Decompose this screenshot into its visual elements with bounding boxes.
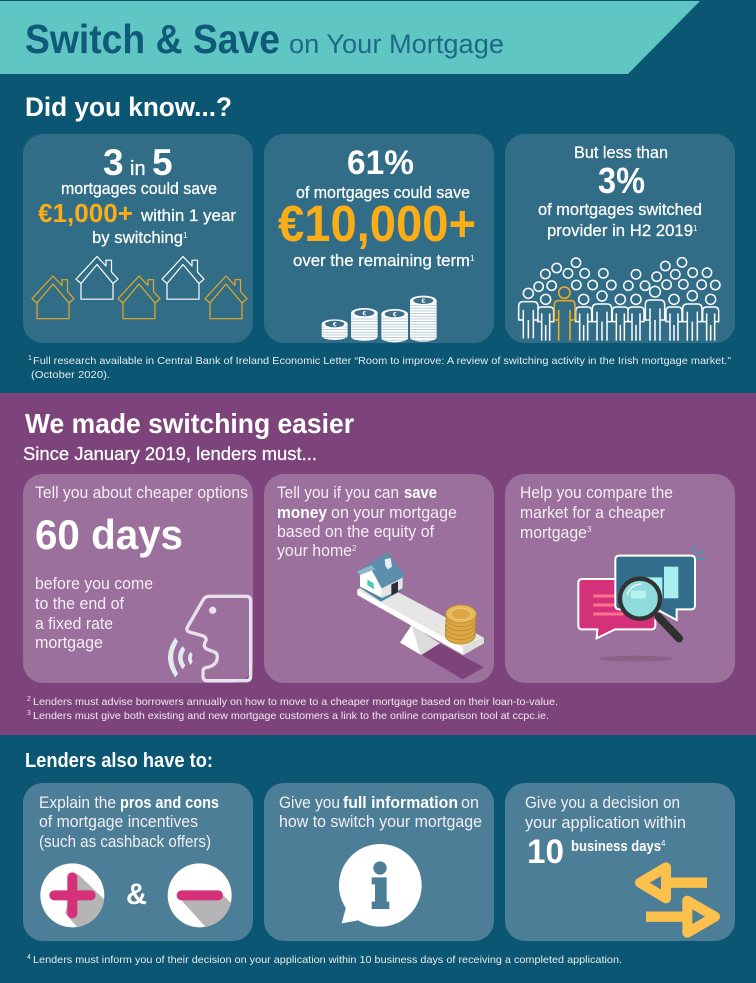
panel: less than 3 percent bbox=[505, 134, 735, 343]
text: pros and cons: of mortgage incentives bbox=[39, 813, 198, 831]
icon: coin stacks: € bbox=[362, 310, 366, 317]
panel: save money bbox=[264, 474, 494, 683]
text: full information: on bbox=[461, 794, 479, 812]
text: but less than: But less than bbox=[574, 143, 668, 162]
icon: minus bbox=[168, 863, 232, 928]
title: Switch & Save bbox=[25, 16, 280, 62]
text: save money: 2 bbox=[352, 544, 357, 553]
section: we made switching easier bbox=[0, 393, 756, 735]
panel: 3 in 5 bbox=[23, 134, 253, 343]
text: pros and cons bbox=[39, 794, 219, 851]
footnotes 2 and 3 bbox=[27, 696, 558, 722]
text: full information: full information bbox=[343, 794, 458, 812]
text: help you compare bbox=[520, 484, 673, 542]
icon: information speech bubble bbox=[339, 844, 422, 927]
stat: 1000 euro: €1,000+ bbox=[38, 198, 133, 228]
icon: crowd of people bbox=[519, 258, 720, 341]
text: give you a decision: your application within bbox=[525, 814, 686, 832]
text: of mortgages switched: of mortgages switched bbox=[538, 200, 702, 219]
icon: house and coins on a scale bbox=[357, 552, 484, 679]
ampersand: & bbox=[126, 878, 147, 911]
footnotes 2 and 3: Lenders must give both existing and new mortgage customers a link to the online comparison tool at ccpc.ie. bbox=[33, 710, 549, 722]
text: pros and cons: (such as cashback offers) bbox=[39, 833, 211, 851]
text: help you compare: 3 bbox=[587, 525, 592, 534]
text: before you come bbox=[35, 575, 153, 652]
stat: 61%: 61% bbox=[347, 144, 414, 182]
stat: 60 days: 60 days bbox=[35, 511, 183, 558]
title bbox=[25, 16, 504, 62]
text: save money: money bbox=[277, 504, 328, 522]
panel: pros and cons bbox=[23, 783, 253, 941]
stat: 3%: 3% bbox=[598, 160, 645, 201]
stat: 10 business days: 10 bbox=[527, 833, 564, 871]
text: provider in H2 2019: provider in H2 2019 bbox=[547, 221, 693, 240]
text: save money: save bbox=[404, 484, 437, 502]
text: before you come: before you come bbox=[35, 575, 153, 593]
stat: 10 business days: 4 bbox=[661, 839, 666, 848]
text: help you compare: Help you compare the bbox=[520, 484, 673, 502]
panel: full information bbox=[264, 783, 494, 941]
title: on Your Mortgage bbox=[289, 29, 504, 59]
text: mortgages could save: mortgages could save bbox=[61, 179, 217, 198]
stat: 10 business days: business days bbox=[571, 838, 661, 855]
text: save money: Tell you if you can bbox=[277, 484, 399, 502]
icon: coin stacks: € bbox=[421, 298, 425, 305]
footnote 4: Lenders must inform you of their decision on your application within 10 business days of receiving a completed application. bbox=[33, 954, 622, 966]
stat: 3 in 5 bbox=[103, 142, 173, 183]
icon: coin stacks: € bbox=[333, 321, 337, 328]
footnote 1: 1 bbox=[28, 355, 32, 362]
footnote 1: Full research available in Central Bank of Ireland Economic Letter “Room to improve: A review of switching activity in the Irish mortgage market.” bbox=[33, 355, 732, 367]
text: before you come: a fixed rate bbox=[35, 615, 113, 633]
text: within 1 year: within 1 year bbox=[140, 206, 236, 225]
text: save money: based on the equity of bbox=[277, 523, 434, 541]
text: give you a decision: Give you a decision on bbox=[525, 794, 680, 812]
text: pros and cons: pros and cons bbox=[120, 794, 219, 812]
icon: houses bbox=[32, 256, 247, 319]
footnotes 2 and 3: 2 bbox=[27, 696, 31, 703]
stat: 3 in 5: 5 bbox=[152, 142, 173, 183]
footnote 1: (October 2020). bbox=[31, 369, 110, 381]
text: provider in H2 2019: 1 bbox=[693, 224, 698, 233]
panel: 61 percent bbox=[264, 134, 494, 343]
stat: 10 business days bbox=[527, 833, 666, 871]
footnote 4: 4 bbox=[27, 954, 31, 961]
text: full information: Give you bbox=[279, 794, 340, 812]
coin stack on scale bbox=[445, 605, 476, 644]
text: help you compare: mortgage bbox=[520, 524, 587, 542]
house on scale bbox=[357, 552, 406, 602]
text: full information bbox=[279, 794, 482, 831]
footnotes 2 and 3: Lenders must advise borrowers annually on how to move to a cheaper mortgage based on their loan-to-value. bbox=[33, 696, 558, 708]
text: cheaper options: Tell you about cheaper options bbox=[35, 484, 248, 502]
heading: We made switching easier bbox=[25, 408, 354, 439]
icon: swap arrows bbox=[640, 867, 715, 933]
text: save money: on your mortgage bbox=[331, 504, 457, 522]
text: full information: how to switch your mortgage bbox=[279, 813, 482, 831]
text: by switching: by switching bbox=[92, 228, 183, 247]
magnifier bbox=[620, 579, 679, 638]
panel: decision in 10 business days bbox=[505, 783, 735, 941]
text: save money bbox=[277, 484, 457, 560]
text: of mortgages could save: of mortgages could save bbox=[296, 183, 470, 202]
panel: 60 days bbox=[23, 474, 253, 683]
subheading: Since January 2019, lenders must... bbox=[23, 444, 317, 464]
header banner bbox=[0, 1, 700, 74]
panel: compare the market bbox=[505, 474, 735, 683]
text: by switching: 1 bbox=[183, 231, 188, 240]
stat: 3 in 5: 3 bbox=[103, 142, 124, 183]
icon: coin stacks bbox=[322, 296, 437, 342]
stat: 10000 euro: €10,000+ bbox=[278, 195, 476, 252]
heading: did you know: Did you know...? bbox=[25, 92, 232, 122]
text: pros and cons: Explain the bbox=[39, 794, 116, 812]
icon: chat bubbles with magnifier bbox=[578, 546, 705, 662]
footnote 1 bbox=[28, 355, 732, 381]
text: save money: your home bbox=[277, 542, 352, 560]
text: before you come: mortgage bbox=[35, 634, 103, 652]
text: over the remaining term: 1 bbox=[470, 254, 475, 263]
heading: lenders also have to: Lenders also have to: bbox=[25, 750, 213, 772]
footnotes 2 and 3: 3 bbox=[27, 710, 31, 717]
icon: plus bbox=[40, 863, 104, 928]
text: before you come: to the end of bbox=[35, 595, 124, 613]
text: give you a decision bbox=[525, 794, 686, 832]
text: help you compare: market for a cheaper bbox=[520, 504, 665, 522]
icon: speaking face bbox=[168, 596, 251, 681]
text: over the remaining term: over the remaining term bbox=[293, 251, 470, 270]
icon: coin stacks: € bbox=[393, 311, 397, 318]
stat: 3 in 5: in bbox=[130, 158, 146, 180]
